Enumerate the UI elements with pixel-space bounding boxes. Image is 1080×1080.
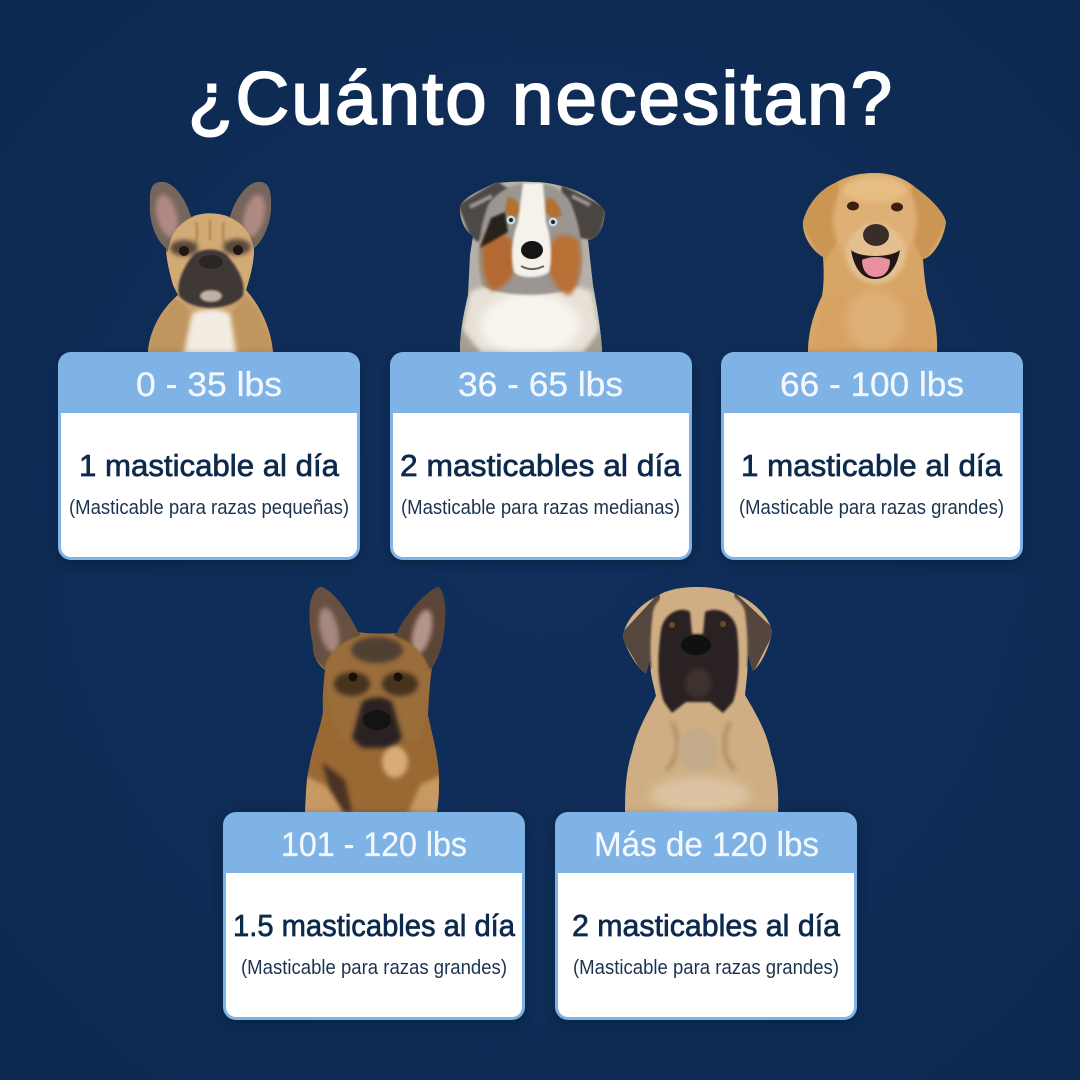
panel: 66 - 100 lbs <box>721 352 1023 560</box>
weight range: 101 - 120 lbs <box>281 826 467 864</box>
note: (Masticable para razas medianas) <box>401 497 680 519</box>
weight range: 0 - 35 lbs <box>136 366 282 404</box>
sub: nose <box>863 224 889 246</box>
sub: head <box>832 173 918 252</box>
sub: ears <box>800 180 838 262</box>
sub: head <box>325 634 430 740</box>
sub: eyes, nose <box>348 672 358 682</box>
sub: ears <box>458 181 510 242</box>
dose: 1 masticable al día <box>741 448 1003 483</box>
sub: eyes, nose <box>669 622 675 628</box>
sub: mouth and tongue <box>851 250 900 279</box>
sub: eyes and nose <box>179 246 189 256</box>
sub: eyes, nose <box>506 216 516 224</box>
card shadows <box>58 356 1023 1024</box>
sub: head <box>167 214 254 307</box>
dose: 1 masticable al día <box>79 448 340 483</box>
dose: 2 masticables al día <box>400 448 682 483</box>
note: (Masticable para razas grandes) <box>573 957 839 979</box>
sub: ears <box>310 587 360 670</box>
dose: 1.5 masticables al día <box>233 908 516 943</box>
sub: dark muzzle <box>178 250 244 308</box>
icon: French bulldog <box>148 182 273 352</box>
note: (Masticable para razas grandes) <box>241 957 507 979</box>
dose: 2 masticables al día <box>572 908 841 943</box>
title: ¿Cuánto necesitan? <box>188 57 892 140</box>
sub: chest fur <box>810 291 936 354</box>
sub: head <box>479 183 582 295</box>
sub: chest folds <box>666 722 735 770</box>
sub: dark muzzle <box>352 698 402 748</box>
sub: white blaze and muzzle <box>512 183 551 277</box>
sub: head <box>649 587 749 696</box>
icon: golden retriever <box>802 173 946 352</box>
note: (Masticable para razas grandes) <box>739 497 1004 519</box>
panel: 0 - 35 lbs <box>58 352 360 560</box>
sub: chest fur <box>382 746 408 778</box>
panel: 101 - 120 lbs <box>223 812 525 1020</box>
weight range: Más de 120 lbs <box>594 826 819 864</box>
panel: 36 - 65 lbs <box>390 352 692 560</box>
sub: chest fur <box>458 283 604 354</box>
icon: English mastiff <box>620 583 780 815</box>
sub: dark face mask <box>658 610 739 713</box>
icon: Australian shepherd <box>460 182 605 352</box>
icon: German shepherd <box>300 583 450 815</box>
sub: orange cheeks <box>482 231 516 291</box>
sub: eyes <box>847 202 859 210</box>
sub: ears <box>623 594 660 673</box>
panel: Más de 120 lbs <box>555 812 857 1020</box>
weight range: 36 - 65 lbs <box>458 366 623 404</box>
weight range: 66 - 100 lbs <box>780 366 964 404</box>
sub: ears <box>150 182 194 252</box>
note: (Masticable para razas pequeñas) <box>69 497 349 519</box>
